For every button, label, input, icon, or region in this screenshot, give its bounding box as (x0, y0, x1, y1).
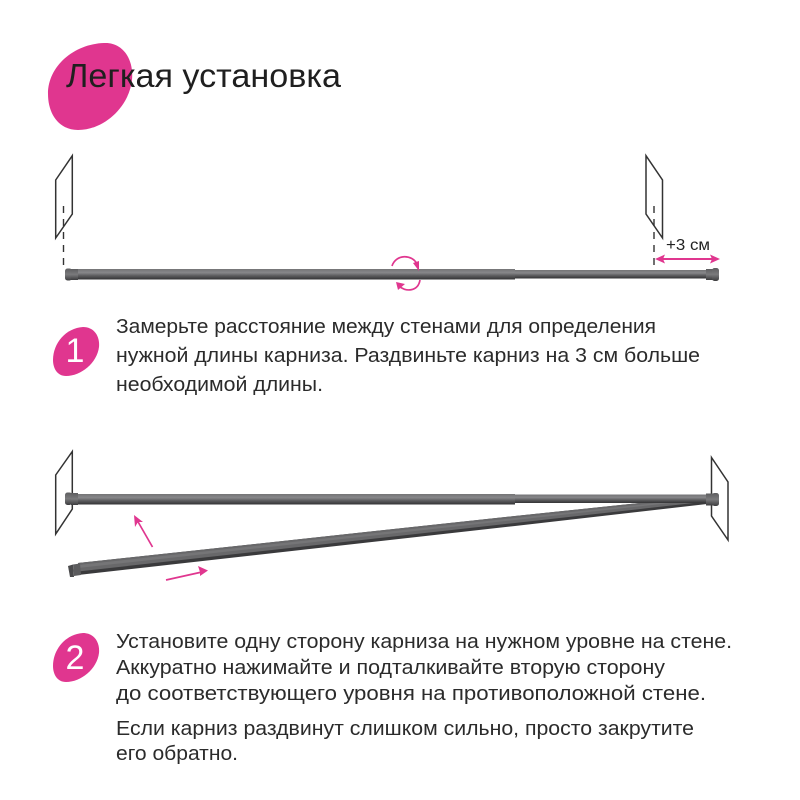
step 2 text (116, 631, 732, 765)
right wall (646, 156, 662, 238)
tilted rod (68, 496, 707, 577)
diagram: step 1 (56, 156, 720, 290)
step 2 text: Если карниз раздвинут слишком сильно, просто закрутите (116, 718, 694, 740)
step 1 text (116, 316, 700, 396)
right dashed guide (653, 206, 655, 266)
step 1 text: необходимой длины. (116, 374, 323, 396)
step 1 number badge (53, 327, 99, 376)
rotation arrows (392, 257, 420, 290)
step 2 text: Аккуратно нажимайте и подталкивайте вторую сторону (116, 657, 666, 679)
arrow: push along (166, 566, 208, 580)
step 2 text: до соответствующего уровня на противоположной стене. (116, 683, 706, 705)
title blob (48, 43, 132, 130)
installed rod (65, 492, 719, 506)
arrow: push up (134, 515, 152, 547)
left dashed guide (62, 206, 64, 268)
left wall (56, 452, 72, 534)
right wall (712, 458, 728, 540)
plus 3 cm label: +3 см (666, 237, 710, 254)
step 2 number badge (53, 633, 99, 682)
diagram: step 2 (56, 452, 728, 580)
title text: Легкая установка (66, 57, 342, 94)
step 1 number badge: 1 (66, 332, 84, 370)
step 2 text: его обратно. (116, 743, 238, 765)
rod (65, 268, 719, 281)
step 1 text: Замерьте расстояние между стенами для определения (116, 316, 656, 338)
measure arrow (655, 254, 720, 264)
step 1 text: нужной длины карниза. Раздвиньте карниз на 3 см больше (116, 345, 700, 367)
left wall (56, 156, 72, 238)
step 2 text: Установите одну сторону карниза на нужном уровне на стене. (116, 631, 732, 653)
step 2 number badge: 2 (66, 639, 84, 677)
title (48, 43, 342, 130)
